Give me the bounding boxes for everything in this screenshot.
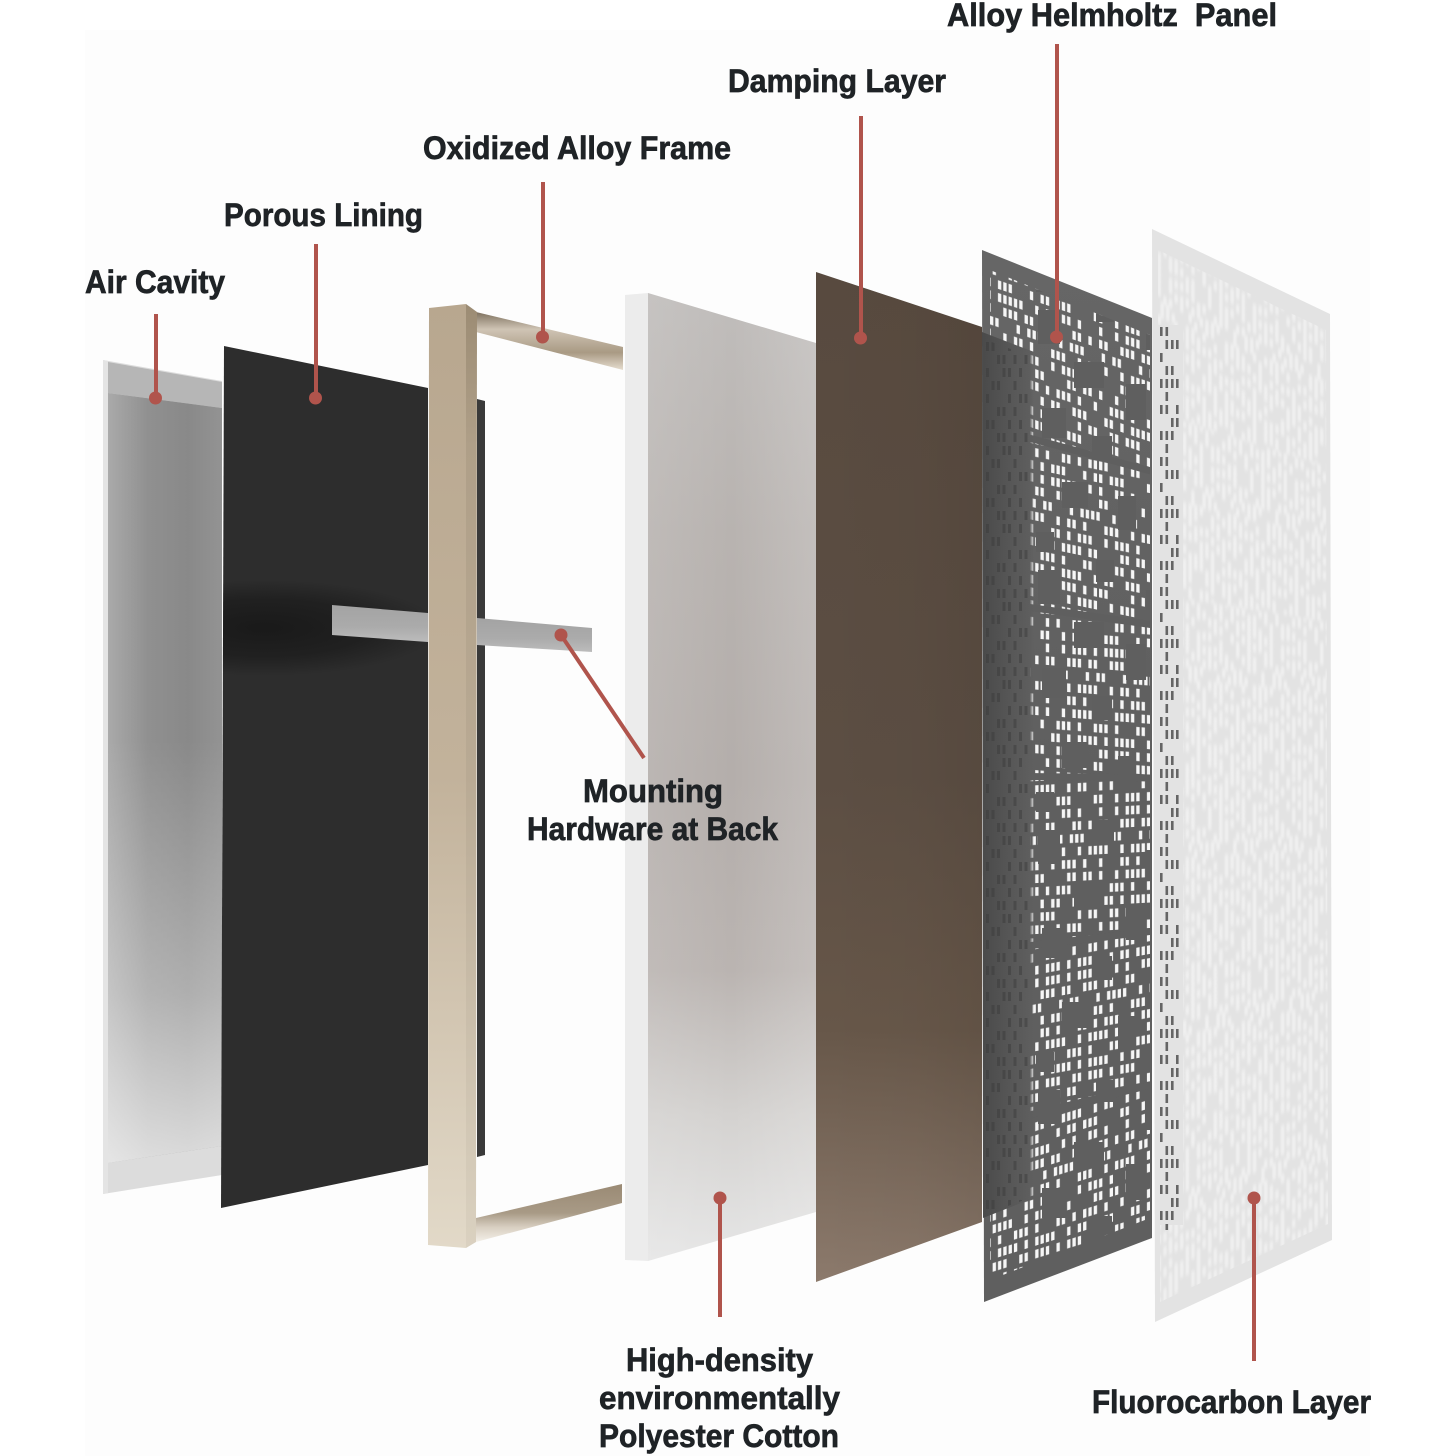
leader: porous lining: [309, 244, 322, 404]
panel: dark backing behind frame: [477, 399, 485, 1157]
label: oxidized alloy frame: Oxidized Alloy Frame: [423, 130, 731, 166]
dimmed perforation zone: [982, 332, 1034, 1218]
leader: polyester cotton: [714, 1192, 726, 1317]
panel: damping layer: [816, 272, 982, 1282]
panel: alloy helmholtz panel: [982, 250, 1152, 1302]
frame front post: [428, 304, 477, 1248]
label: high-density polyester cotton: [599, 1342, 840, 1454]
panel: porous lining layer: [221, 346, 428, 1208]
fluorocarbon perforations: [1152, 229, 1332, 1322]
label: mounting hardware at back: [527, 773, 778, 847]
leader: alloy helmholtz panel: [1050, 44, 1063, 344]
leader: fluorocarbon layer: [1248, 1192, 1260, 1361]
mounting hardware bar: [332, 605, 592, 652]
label: mounting hardware at back: Hardware at Back: [527, 811, 778, 847]
leader: oxidized alloy frame: [536, 182, 549, 344]
frame bottom rail: [476, 1184, 622, 1242]
leader: damping layer: [854, 116, 867, 344]
dark holes showing through: [1160, 325, 1180, 1230]
panel: polyester cotton layer: [625, 293, 816, 1261]
label: air cavity: Air Cavity: [85, 264, 225, 300]
label: fluorocarbon layer: Fluorocarbon Layer: [1092, 1384, 1371, 1420]
panel: oxidized alloy frame: [428, 304, 623, 1248]
alloy perforations: [990, 271, 1150, 1275]
label: porous lining: Porous Lining: [224, 197, 423, 233]
panel: fluorocarbon layer: [1152, 229, 1332, 1322]
panel: air cavity layer: [103, 360, 222, 1194]
label: high-density polyester cotton: High-density: [626, 1342, 813, 1378]
label: high-density polyester cotton: environmentally: [599, 1380, 840, 1416]
leader: air cavity: [149, 314, 162, 404]
label: mounting hardware at back: Mounting: [583, 773, 723, 809]
frame top rail: [476, 312, 623, 370]
label: damping layer: Damping Layer: [728, 63, 946, 99]
label: high-density polyester cotton: Polyester Cotton: [599, 1418, 839, 1454]
leader: mounting hardware: [554, 628, 644, 758]
